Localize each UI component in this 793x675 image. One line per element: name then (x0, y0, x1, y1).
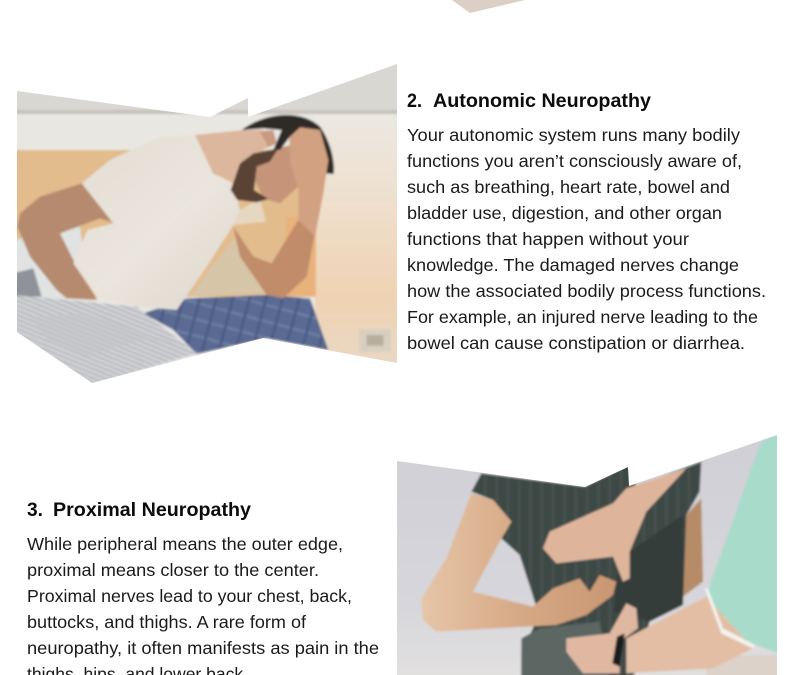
text block: autonomic neuropathy: such as breathing, heart rate, bowel and (407, 177, 730, 197)
photo fragment: previous section (452, 0, 525, 13)
text block: autonomic neuropathy: how the associated bodily process functions. (407, 281, 766, 301)
text block: autonomic neuropathy: functions that happen without your (407, 229, 689, 249)
photo: therapist examining patient's back (393, 432, 783, 675)
heading: proximal neuropathy: 3. (27, 500, 43, 521)
text block: autonomic neuropathy: Your autonomic system runs many bodily (407, 125, 740, 145)
text block: proximal neuropathy: neuropathy, it often manifests as pain in the (27, 638, 379, 658)
heading: proximal neuropathy: Proximal Neuropathy (53, 500, 251, 521)
text block: proximal neuropathy (27, 534, 379, 675)
text block: autonomic neuropathy: functions you aren’t consciously aware of, (407, 151, 742, 171)
text block: autonomic neuropathy: For example, an injured nerve leading to the (407, 307, 758, 327)
text block: autonomic neuropathy (407, 125, 766, 353)
photo: man holding his head on a bed (13, 60, 403, 393)
heading: autonomic neuropathy: Autonomic Neuropathy (433, 91, 651, 112)
text block: autonomic neuropathy: knowledge. The damaged nerves change (407, 255, 739, 275)
text block: autonomic neuropathy: bladder use, digestion, and other organ (407, 203, 722, 223)
text block: proximal neuropathy: Proximal nerves lead to your chest, back, (27, 586, 352, 606)
text block: autonomic neuropathy: bowel can cause constipation or diarrhea. (407, 333, 745, 353)
text block: proximal neuropathy: While peripheral means the outer edge, (27, 534, 343, 554)
heading: autonomic neuropathy: 2. (407, 91, 422, 112)
text block: proximal neuropathy: buttocks, and thighs. A rare form of (27, 612, 306, 632)
text block: proximal neuropathy: proximal means closer to the center. (27, 560, 319, 580)
